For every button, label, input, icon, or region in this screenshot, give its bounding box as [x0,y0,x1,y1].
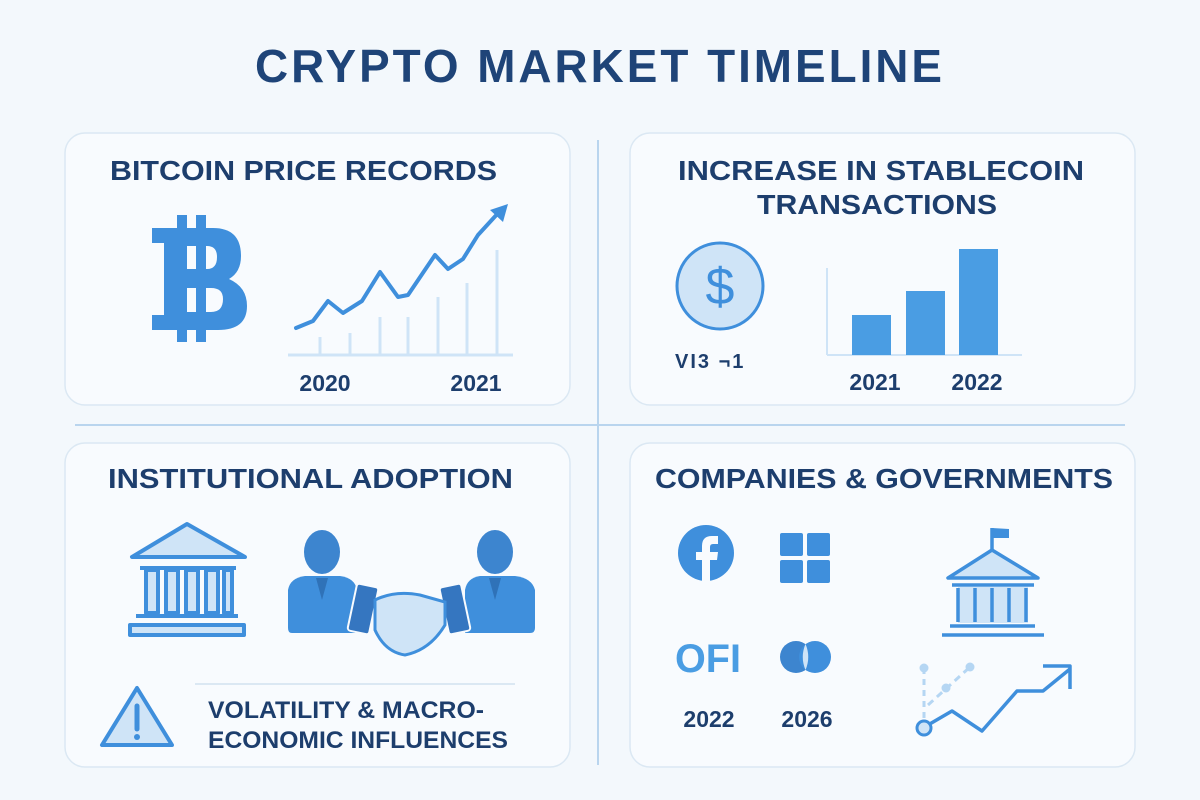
icon: handshake [288,530,535,655]
icon: mastercard [780,641,831,673]
panel: companies & governments: 2026 [781,706,833,732]
bar chart [827,249,1022,355]
icon: bitcoin [152,215,247,342]
icon: bank [130,524,245,635]
logo: OFI: OFI [675,637,741,681]
icon: coin [677,243,763,329]
panel: companies & governments [630,443,1135,767]
heading: companies: COMPANIES & GOVERNMENTS [655,463,1113,494]
panel: bitcoin price records [65,133,570,405]
heading: stablecoin: INCREASE IN STABLECOIN [678,155,1084,186]
title: CRYPTO MARKET TIMELINE [255,40,945,92]
text: volatility [208,697,508,754]
years: 2020 [299,370,351,396]
panel: bitcoin price records: 2021 [450,370,502,396]
chart: price line [288,204,513,355]
text: volatility: VOLATILITY & MACRO- [208,697,484,724]
panel: stablecoin: 2022 [951,369,1003,395]
panel: stablecoin: TRANSACTIONS [757,189,997,220]
text: volatility: ECONOMIC INFLUENCES [208,727,508,754]
panel: companies & governments: 2022 [683,706,735,732]
icon: warning [102,688,172,745]
panel: institutional adoption [65,443,570,767]
icon: windows [780,533,830,583]
icon: facebook [678,525,734,582]
panel: stablecoin [630,133,1135,405]
heading: institutional: INSTITUTIONAL ADOPTION [108,463,513,494]
panel: stablecoin: 2021 [849,369,901,395]
chart: trend arrow [917,662,1070,735]
coin label: VI3 ¬1 [675,351,745,373]
heading: bitcoin: BITCOIN PRICE RECORDS [110,155,497,186]
icon: government building [942,528,1044,635]
icon: coin: $ [706,258,735,316]
